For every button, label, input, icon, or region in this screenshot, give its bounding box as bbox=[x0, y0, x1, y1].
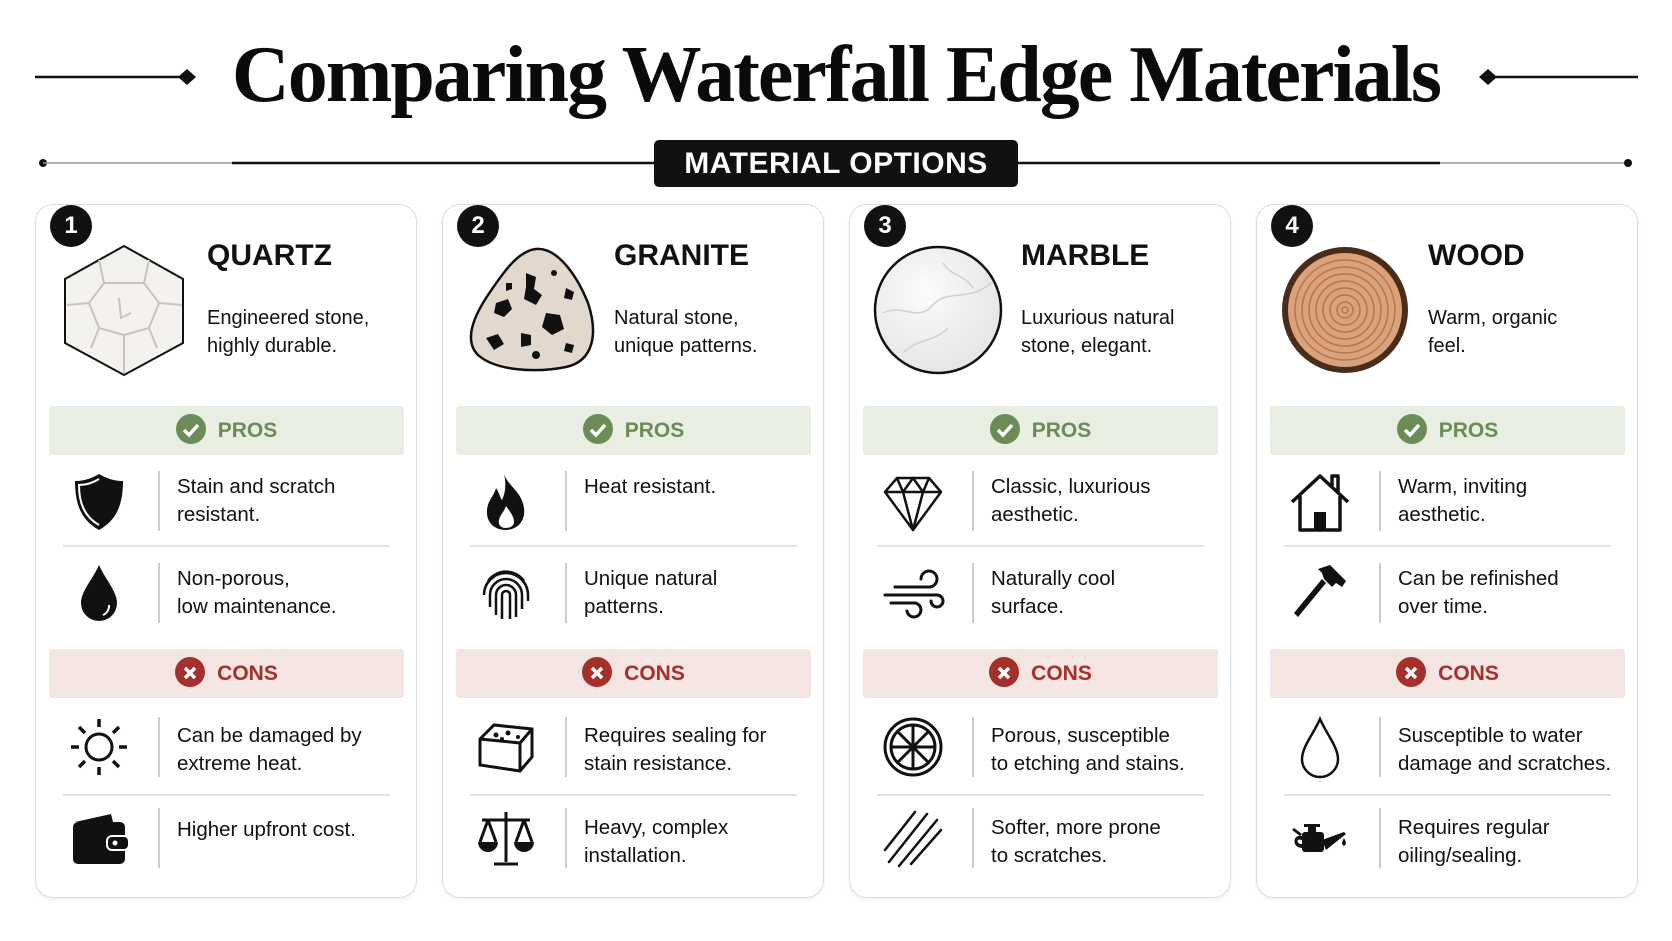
icon: oil can bbox=[1292, 824, 1346, 852]
con 1: extreme heat. bbox=[177, 752, 302, 775]
panel: marble bbox=[849, 204, 1231, 898]
icon: citrus slice bbox=[884, 718, 942, 776]
pros header: PROS bbox=[218, 419, 277, 442]
icon: outline drop bbox=[1300, 716, 1340, 778]
pro 1: Warm, inviting bbox=[1398, 475, 1527, 498]
number badge 1: 1 bbox=[64, 212, 78, 239]
number badge 3: 3 bbox=[878, 212, 892, 239]
con 1 bbox=[991, 724, 1185, 775]
image: quartz hexagon bbox=[64, 244, 184, 376]
description: Warm, organic bbox=[1428, 307, 1557, 329]
con 2: to scratches. bbox=[991, 844, 1107, 867]
pros header: PROS bbox=[1032, 419, 1091, 442]
pros header bbox=[49, 406, 404, 455]
panel: quartz bbox=[35, 204, 417, 898]
cons header bbox=[49, 649, 404, 698]
con 1 bbox=[584, 724, 766, 775]
cons header: CONS bbox=[624, 662, 685, 685]
pro 2 bbox=[991, 567, 1115, 618]
number badge 3 bbox=[864, 205, 906, 247]
description bbox=[1021, 307, 1174, 357]
con 1: Porous, susceptible bbox=[991, 724, 1170, 747]
number badge 2: 2 bbox=[471, 212, 485, 239]
icon: sponge bbox=[478, 723, 534, 773]
con 2: installation. bbox=[584, 844, 687, 867]
description: Luxurious natural bbox=[1021, 307, 1174, 329]
cons header: CONS bbox=[1438, 662, 1499, 685]
pro 2 bbox=[1398, 567, 1559, 618]
icon: diamond bbox=[884, 476, 942, 532]
icon: fingerprint bbox=[482, 570, 530, 619]
description: highly durable. bbox=[207, 335, 337, 357]
pro 1: resistant. bbox=[177, 503, 260, 526]
pro 2: Naturally cool bbox=[991, 567, 1115, 590]
number badge 1 bbox=[50, 205, 92, 247]
con 1: Susceptible to water bbox=[1398, 724, 1583, 747]
pro 2: Non-porous, bbox=[177, 567, 290, 590]
icon: wallet bbox=[73, 814, 128, 864]
pro 2 bbox=[177, 567, 337, 618]
pro 1: aesthetic. bbox=[991, 503, 1079, 526]
image: marble disc bbox=[874, 246, 1002, 374]
name: GRANITE bbox=[614, 239, 749, 272]
icon: shield bbox=[75, 474, 123, 530]
pro 1 bbox=[177, 475, 335, 526]
pro 1 bbox=[1398, 475, 1527, 526]
number badge 4: 4 bbox=[1285, 212, 1299, 239]
image: granite stone bbox=[470, 248, 594, 372]
number badge 2 bbox=[457, 205, 499, 247]
title rule right bbox=[1479, 69, 1638, 85]
pro 1: aesthetic. bbox=[1398, 503, 1486, 526]
pros header: PROS bbox=[1439, 419, 1498, 442]
description: unique patterns. bbox=[614, 335, 757, 357]
section badge: MATERIAL OPTIONS bbox=[684, 147, 988, 180]
pro 2: surface. bbox=[991, 595, 1064, 618]
cons header: CONS bbox=[217, 662, 278, 685]
icon: house bbox=[1290, 474, 1350, 532]
cons header bbox=[1270, 649, 1625, 698]
pro 2: low maintenance. bbox=[177, 595, 337, 618]
icon: scales bbox=[478, 812, 534, 866]
icon: scratches bbox=[884, 810, 942, 868]
pro 1: Stain and scratch bbox=[177, 475, 335, 498]
con 1: stain resistance. bbox=[584, 752, 732, 775]
cons header: CONS bbox=[1031, 662, 1092, 685]
description: Natural stone, bbox=[614, 307, 739, 329]
description bbox=[1428, 307, 1557, 357]
pros header: PROS bbox=[625, 419, 684, 442]
con 1 bbox=[177, 724, 362, 775]
con 2 bbox=[1398, 814, 1633, 870]
image: wood slice bbox=[1282, 247, 1408, 373]
name: QUARTZ bbox=[207, 239, 332, 272]
icon: sun bbox=[71, 719, 127, 775]
description: Engineered stone, bbox=[207, 307, 369, 329]
number badge 4 bbox=[1271, 205, 1313, 247]
title rule left bbox=[35, 69, 196, 85]
title: Comparing Waterfall Edge Materials bbox=[232, 31, 1440, 119]
pro 1: Heat resistant. bbox=[584, 475, 716, 498]
description bbox=[614, 307, 757, 357]
cons header bbox=[456, 649, 811, 698]
con 1: to etching and stains. bbox=[991, 752, 1185, 775]
con 2: Requires regular bbox=[1398, 816, 1550, 839]
pro 1 bbox=[991, 475, 1150, 526]
name: MARBLE bbox=[1021, 239, 1149, 272]
pro 2: Can be refinished bbox=[1398, 567, 1559, 590]
con 2 bbox=[991, 816, 1161, 867]
con 1: damage and scratches. bbox=[1398, 752, 1611, 775]
con 1: Requires sealing for bbox=[584, 724, 766, 747]
pros header bbox=[1270, 406, 1625, 455]
icon: wind bbox=[884, 570, 944, 618]
con 1: Can be damaged by bbox=[177, 724, 362, 747]
con 1 bbox=[1398, 724, 1611, 775]
panel: wood bbox=[1256, 204, 1638, 898]
con 2: Higher upfront cost. bbox=[177, 818, 356, 841]
section badge bbox=[654, 140, 1018, 187]
description bbox=[207, 307, 369, 357]
pros header bbox=[863, 406, 1218, 455]
description: feel. bbox=[1428, 335, 1466, 357]
icon: drop bbox=[81, 565, 117, 621]
section rule bbox=[39, 159, 1632, 167]
pro 2: Unique natural bbox=[584, 567, 717, 590]
pro 2: patterns. bbox=[584, 595, 664, 618]
pro 2: over time. bbox=[1398, 595, 1488, 618]
cons header bbox=[863, 649, 1218, 698]
panel: granite bbox=[442, 204, 824, 898]
icon: hammer bbox=[1294, 565, 1346, 617]
con 2: Heavy, complex bbox=[584, 816, 728, 839]
con 2 bbox=[584, 816, 728, 867]
pros header bbox=[456, 406, 811, 455]
con 2: oiling/sealing. bbox=[1398, 844, 1522, 867]
pro 2 bbox=[584, 567, 717, 618]
pro 1: Classic, luxurious bbox=[991, 475, 1150, 498]
description: stone, elegant. bbox=[1021, 335, 1152, 357]
name: WOOD bbox=[1428, 239, 1525, 272]
icon: flame bbox=[486, 474, 524, 530]
con 2: Softer, more prone bbox=[991, 816, 1161, 839]
